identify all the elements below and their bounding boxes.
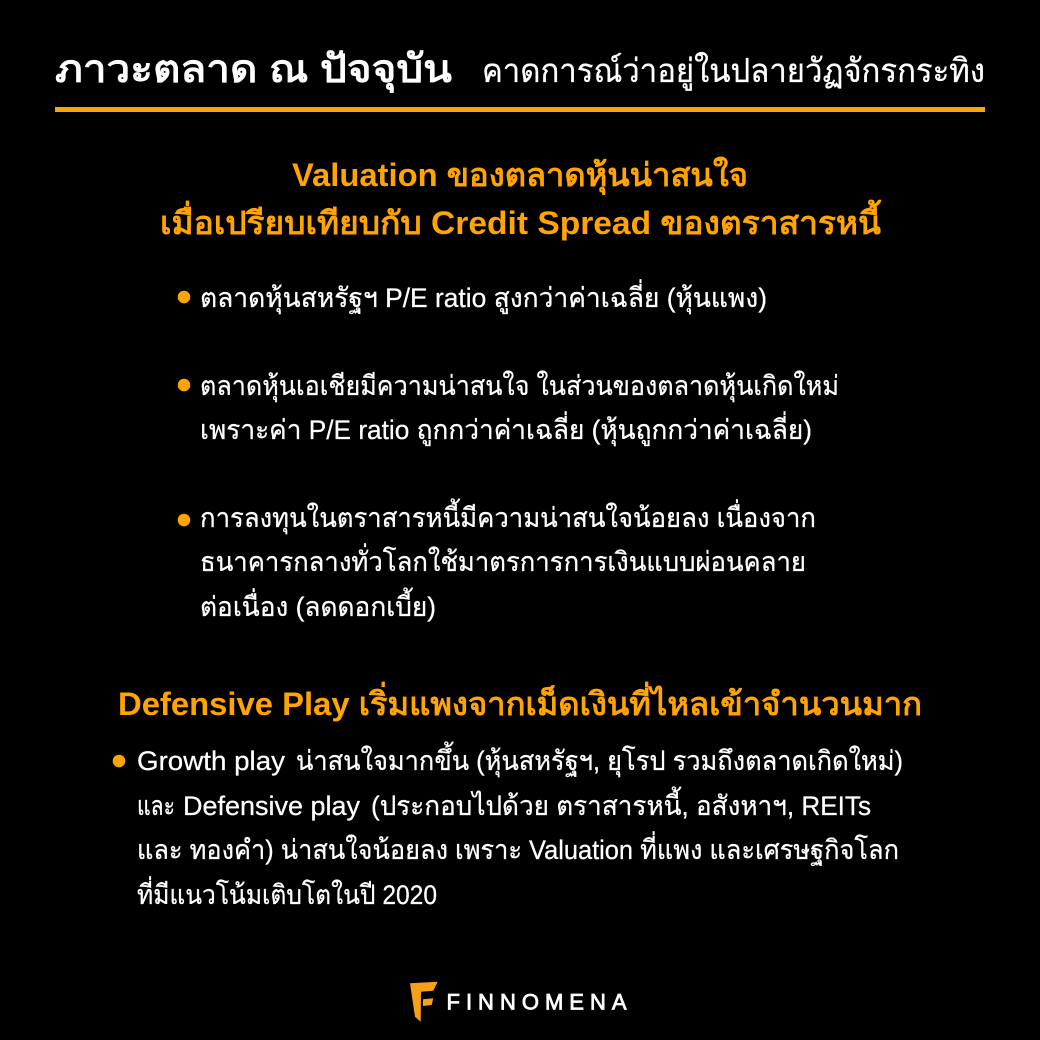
header rule bbox=[55, 107, 985, 112]
heading: valuation bbox=[160, 156, 882, 241]
bullet: Asian equities: ตลาดหุ้นเอเชียมีความน่าสนใจ ในส่วนของตลาดหุ้นเกิดใหม่ bbox=[200, 370, 839, 403]
bullet: growth vs defensive bbox=[113, 741, 903, 910]
heading: defensive play: Defensive Play เริ่มแพงจากเม็ดเงินที่ไหลเข้าจำนวนมาก bbox=[118, 681, 922, 722]
bullet: Asian equities bbox=[178, 370, 839, 447]
bullet: Asian equities: เพราะค่า P/E ratio ถูกกว่าค่าเฉลี่ย (หุ้นถูกกว่าค่าเฉลี่ย) bbox=[200, 411, 812, 447]
header: title and subtitle bbox=[55, 48, 985, 93]
logo: FINNOMENA bbox=[410, 982, 632, 1022]
bullet: bonds: ธนาคารกลางทั่วโลกใช้มาตรการการเงินแบบผ่อนคลาย bbox=[200, 543, 806, 577]
subtitle: คาดการณ์ว่าอยู่ในปลายวัฏจักรกระทิง bbox=[482, 52, 985, 91]
wordmark: FINNOMENA bbox=[446, 990, 632, 1014]
bullet: growth vs defensive: Growth play bbox=[137, 746, 286, 776]
bullet: growth vs defensive: Defensive play bbox=[183, 791, 360, 821]
heading: valuation: Valuation ของตลาดหุ้นน่าสนใจ bbox=[292, 156, 748, 196]
bullet: growth vs defensive: น่าสนใจมากขึ้น (หุ้นสหรัฐฯ, ยุโรป รวมถึงตลาดเกิดใหม่) bbox=[296, 741, 903, 778]
icon: F mark bbox=[410, 982, 438, 1022]
bullet: growth vs defensive: ที่มีแนวโน้มเติบโตในปี 2020 bbox=[137, 876, 437, 910]
bullet: bonds bbox=[178, 498, 816, 622]
bullet: growth vs defensive: และ bbox=[137, 791, 175, 821]
heading: valuation: เมื่อเปรียบเทียบกับ Credit Spread ของตราสารหนี้ bbox=[160, 199, 882, 241]
bullet: growth vs defensive: (ประกอบไปด้วย ตราสารหนี้, อสังหาฯ, REITs bbox=[371, 786, 871, 821]
bullet: growth vs defensive: และ ทองคำ) น่าสนใจน้อยลง เพราะ Valuation ที่แพง และเศรษฐกิจโลก bbox=[137, 831, 899, 866]
bullet: bonds: ต่อเนื่อง (ลดดอกเบี้ย) bbox=[200, 587, 436, 622]
title: ภาวะตลาด ณ ปัจจุบัน bbox=[55, 48, 452, 93]
bullet: US equities: ตลาดหุ้นสหรัฐฯ P/E ratio สูงกว่าค่าเฉลี่ย (หุ้นแพง) bbox=[200, 279, 767, 315]
bullet: bonds: การลงทุนในตราสารหนี้มีความน่าสนใจน้อยลง เนื่องจาก bbox=[200, 498, 816, 535]
